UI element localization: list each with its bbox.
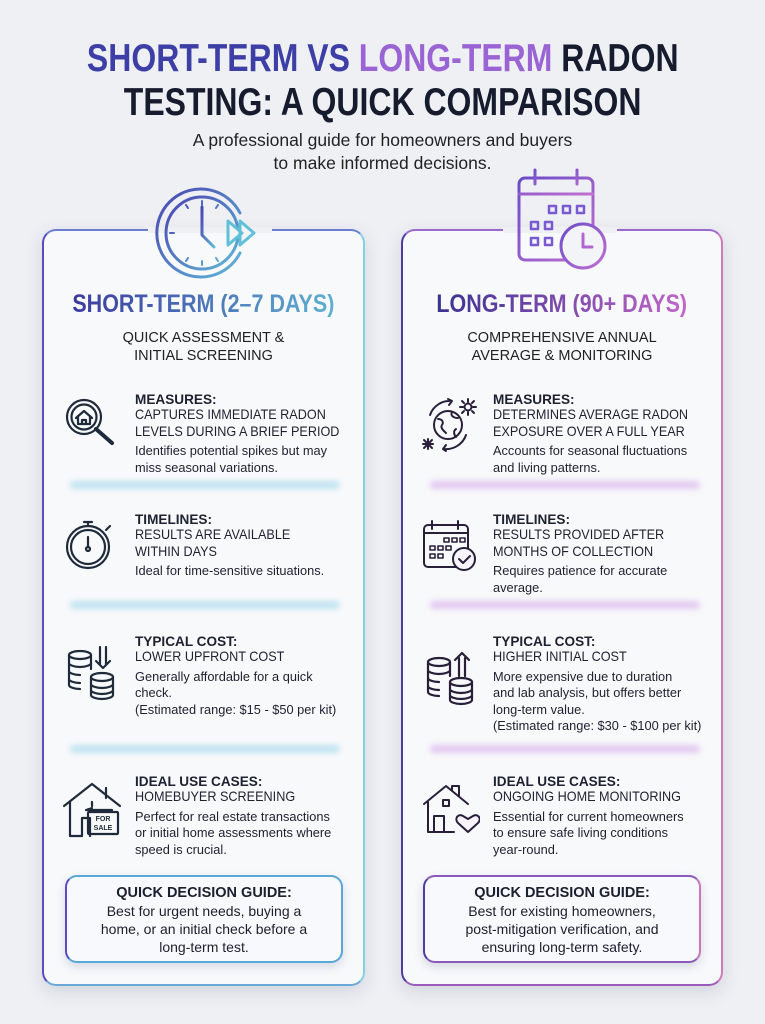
text: long cost: HIGHER INITIAL COST — [493, 649, 627, 664]
subheading: long-term: AVERAGE & MONITORING — [472, 348, 652, 364]
text: long measures: MEASURES: — [493, 392, 575, 407]
text: long timelines: MONTHS OF COLLECTION — [493, 544, 653, 558]
text: short use cases: IDEAL USE CASES: — [135, 774, 262, 789]
text: short cost: check. — [135, 685, 172, 700]
subheading: short-term — [123, 330, 284, 364]
panel: long-term — [401, 229, 723, 986]
subheading: long-term — [467, 330, 657, 364]
heading: short-term: SHORT-TERM (2–7 DAYS) — [72, 290, 335, 318]
icon: calendar with clock — [518, 168, 606, 270]
text: short use cases: Perfect for real estate transactions — [135, 808, 330, 824]
icon: house heart — [423, 785, 480, 833]
subheading: long-term: COMPREHENSIVE ANNUAL — [467, 330, 657, 346]
subtitle: to make informed decisions. — [274, 153, 491, 173]
text: short measures: MEASURES: — [135, 392, 217, 407]
subheading: short-term: INITIAL SCREENING — [134, 348, 273, 364]
text: long use cases — [493, 774, 684, 857]
callout: short decision guide: home, or an initial check before a — [101, 921, 307, 937]
text: long timelines: Requires patience for accurate — [493, 563, 667, 578]
panel: short-term — [42, 229, 365, 986]
text: long timelines: average. — [493, 580, 543, 595]
text: short use cases: speed is crucial. — [135, 842, 227, 857]
icon: stopwatch — [66, 520, 112, 570]
text: long cost: TYPICAL COST: — [493, 634, 595, 649]
text: short timelines: WITHIN DAYS — [135, 544, 217, 558]
title: SHORT-TERM VS LONG-TERM RADON — [87, 37, 678, 80]
text: long cost: More expensive due to duration — [493, 668, 672, 684]
text: long measures — [493, 392, 688, 475]
callout: short decision guide: Best for urgent needs, buying a — [107, 903, 301, 919]
text: short timelines: Ideal for time-sensitive situations. — [135, 563, 324, 578]
text: long use cases: year-round. — [493, 842, 558, 857]
text: short cost: TYPICAL COST: — [135, 634, 237, 649]
callout: short decision guide: long-term test. — [159, 939, 249, 955]
text: short use cases — [135, 774, 331, 857]
callout: long decision guide: post-mitigation verification, and — [466, 921, 658, 937]
text: long use cases: Essential for current homeowners — [493, 808, 684, 824]
callout: short decision guide: QUICK DECISION GUIDE: — [116, 885, 292, 901]
text: long cost: and lab analysis, but offers better — [493, 685, 681, 700]
text: short measures: Identifies potential spikes but may — [135, 443, 327, 458]
icon: house for sale — [62, 782, 122, 838]
text: short timelines: RESULTS ARE AVAILABLE — [135, 527, 290, 542]
text: long cost: (Estimated range: $30 - $100 per kit) — [493, 718, 701, 733]
callout: long decision guide: Best for existing homeowners, — [468, 903, 656, 919]
text: long measures: and living patterns. — [493, 460, 600, 475]
text: long cost — [493, 634, 701, 733]
title — [87, 37, 678, 124]
subtitle — [192, 130, 572, 173]
icon: magnifier house — [66, 398, 114, 446]
text: short cost — [135, 634, 336, 717]
icon: coins down — [68, 646, 114, 700]
text: short timelines — [135, 512, 324, 578]
callout: long decision guide — [423, 875, 701, 963]
icon: house for sale: FOR — [96, 816, 110, 823]
text: short use cases: or initial home assessments where — [135, 825, 331, 840]
icon: calendar check — [423, 520, 476, 571]
text: long use cases: IDEAL USE CASES: — [493, 774, 620, 789]
text: long measures: EXPOSURE OVER A FULL YEAR — [493, 424, 685, 438]
text: short timelines: TIMELINES: — [135, 512, 212, 527]
text: long measures: DETERMINES AVERAGE RADON — [493, 407, 688, 422]
text: long timelines: TIMELINES: — [493, 512, 570, 527]
callout: long decision guide: ensuring long-term safety. — [482, 939, 642, 955]
subtitle: A professional guide for homeowners and buyers — [193, 130, 572, 150]
heading: long-term: LONG-TERM (90+ DAYS) — [437, 290, 687, 318]
text: long measures: Accounts for seasonal fluctuations — [493, 443, 687, 458]
text: short measures — [135, 392, 339, 475]
icon: house for sale: SALE — [94, 825, 113, 832]
icon: globe seasons — [422, 398, 477, 452]
text: short measures: CAPTURES IMMEDIATE RADON — [135, 407, 326, 422]
icon: clock with fast-forward — [155, 188, 256, 278]
text: long use cases: ONGOING HOME MONITORING — [493, 789, 681, 804]
title: TESTING: A QUICK COMPARISON — [124, 81, 641, 124]
text: long cost: long-term value. — [493, 702, 585, 717]
text: short cost: (Estimated range: $15 - $50 per kit) — [135, 702, 336, 717]
subheading: short-term: QUICK ASSESSMENT & — [123, 330, 284, 346]
text: short measures: LEVELS DURING A BRIEF PERIOD — [135, 424, 339, 438]
text: long timelines — [493, 512, 667, 595]
text: short use cases: HOMEBUYER SCREENING — [135, 789, 295, 804]
callout: short decision guide — [65, 875, 343, 963]
text: long use cases: to ensure safe living conditions — [493, 825, 668, 840]
text: short cost: LOWER UPFRONT COST — [135, 649, 284, 664]
text: short cost: Generally affordable for a quick — [135, 668, 313, 684]
callout: long decision guide: QUICK DECISION GUIDE: — [474, 885, 650, 901]
text: long timelines: RESULTS PROVIDED AFTER — [493, 527, 664, 542]
text: short measures: miss seasonal variations. — [135, 460, 278, 475]
icon: coins up — [426, 652, 474, 706]
